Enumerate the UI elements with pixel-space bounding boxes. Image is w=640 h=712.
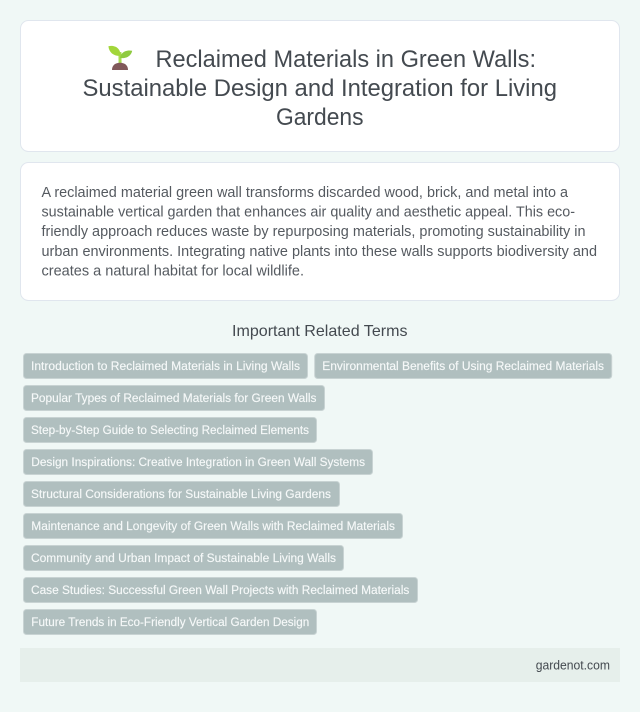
tag: future trends	[24, 610, 316, 634]
tag: step-by-step guide: Step-by-Step Guide to Selecting Reclaimed Elements	[31, 423, 309, 437]
text block: description: urban environments. Integrating native plants into these walls supports biodiversity and	[42, 244, 597, 260]
tag: community impact: Community and Urban Impact of Sustainable Living Walls	[31, 551, 336, 565]
tag: design inspirations: Design Inspirations: Creative Integration in Green Wall Systems	[31, 455, 365, 469]
tag: popular types: Popular Types of Reclaimed Materials for Green Walls	[31, 391, 316, 405]
title: Gardens	[276, 104, 364, 131]
tag: environmental benefits: Environmental Benefits of Using Reclaimed Materials	[322, 359, 604, 373]
icon: seedling	[108, 46, 132, 70]
tag: environmental benefits	[315, 354, 612, 378]
text block: description: creates a natural habitat for local wildlife.	[42, 263, 304, 279]
footer	[20, 648, 620, 682]
title: Reclaimed Materials in Green Walls:	[156, 46, 536, 73]
tag: step-by-step guide	[24, 418, 316, 442]
title	[82, 46, 557, 131]
tag: structural considerations	[24, 482, 340, 506]
heading: related terms: Important Related Terms	[232, 323, 408, 340]
tag: popular types	[24, 386, 324, 410]
title: Sustainable Design and Integration for Living	[82, 75, 557, 102]
tag: future trends: Future Trends in Eco-Friendly Vertical Garden Design	[31, 615, 309, 629]
tag: introduction	[24, 354, 308, 378]
text block: description: A reclaimed material green wall transforms discarded wood, brick, and metal into a	[42, 185, 569, 201]
panel: description	[20, 162, 620, 300]
tag: maintenance: Maintenance and Longevity of Green Walls with Reclaimed Materials	[31, 519, 395, 533]
tag: structural considerations: Structural Considerations for Sustainable Living Gardens	[31, 487, 331, 501]
text block: description	[42, 185, 597, 279]
text block: description: sustainable vertical garden that enhances air quality and aesthetic appeal. This eco-	[42, 205, 575, 221]
footer source text: gardenot.com	[536, 658, 610, 672]
tag: case studies: Case Studies: Successful Green Wall Projects with Reclaimed Materials	[31, 583, 409, 597]
tag: design inspirations	[24, 450, 372, 474]
tag: introduction: Introduction to Reclaimed Materials in Living Walls	[31, 359, 300, 373]
panel: related term tags	[24, 354, 612, 634]
tag: community impact	[24, 546, 344, 570]
tag: maintenance	[24, 514, 402, 538]
text block: description: friendly approach reduces waste by repurposing materials, promoting sustainability in	[42, 224, 586, 240]
panel: header	[20, 20, 620, 152]
tag: case studies	[24, 578, 418, 602]
